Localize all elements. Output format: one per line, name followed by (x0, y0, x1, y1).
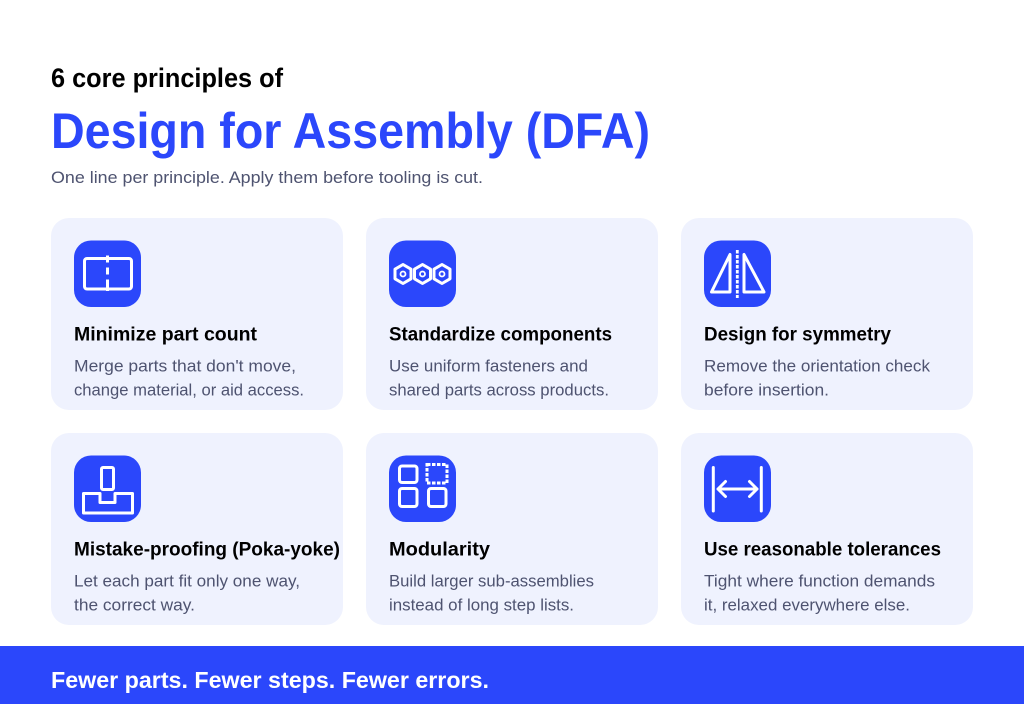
panel: standardize components (366, 218, 658, 410)
icon: split part merged (74, 240, 141, 307)
card text: Build larger sub-assemblies (389, 572, 594, 590)
icon: three hex nuts (389, 240, 456, 307)
panel: reasonable tolerances (681, 433, 973, 625)
card text line two: shared parts across products. (389, 382, 609, 400)
card heading: Use reasonable tolerances (704, 540, 941, 560)
icon: keyed peg and slot (74, 456, 141, 522)
card text line two: the correct way. (74, 596, 195, 614)
icon: dimension arrow (704, 456, 771, 522)
card text: Let each part fit only one way, (74, 572, 300, 590)
title: Design for Assembly (DFA) (51, 103, 650, 159)
card text: Tight where function demands (704, 572, 935, 590)
card text line two: it, relaxed everywhere else. (704, 596, 910, 614)
card text line two: change material, or aid access. (74, 382, 304, 400)
subtitle: One line per principle. Apply them before tooling is cut. (51, 168, 483, 187)
icon: module grid (389, 456, 456, 522)
card text: Use uniform fasteners and (389, 358, 588, 376)
card heading: Standardize components (389, 324, 612, 346)
panel: mistake-proofing (51, 433, 343, 625)
panel: minimize part count (51, 218, 343, 410)
panel: modularity (366, 433, 658, 625)
footer text: Fewer parts. Fewer steps. Fewer errors. (51, 667, 489, 693)
heading: intro line: 6 core principles of (51, 63, 283, 93)
card heading: Modularity (389, 540, 490, 560)
card text line two: instead of long step lists. (389, 596, 574, 614)
icon: mirrored triangles (704, 240, 771, 307)
card heading: Mistake-proofing (Poka-yoke) (74, 540, 340, 560)
card heading: Minimize part count (74, 324, 258, 346)
card text: Remove the orientation check (704, 358, 931, 376)
card text: Merge parts that don't move, (74, 358, 296, 376)
panel: design for symmetry (681, 218, 973, 410)
card heading: Design for symmetry (704, 324, 891, 346)
footer banner (0, 646, 1024, 704)
card text line two: before insertion. (704, 382, 829, 400)
